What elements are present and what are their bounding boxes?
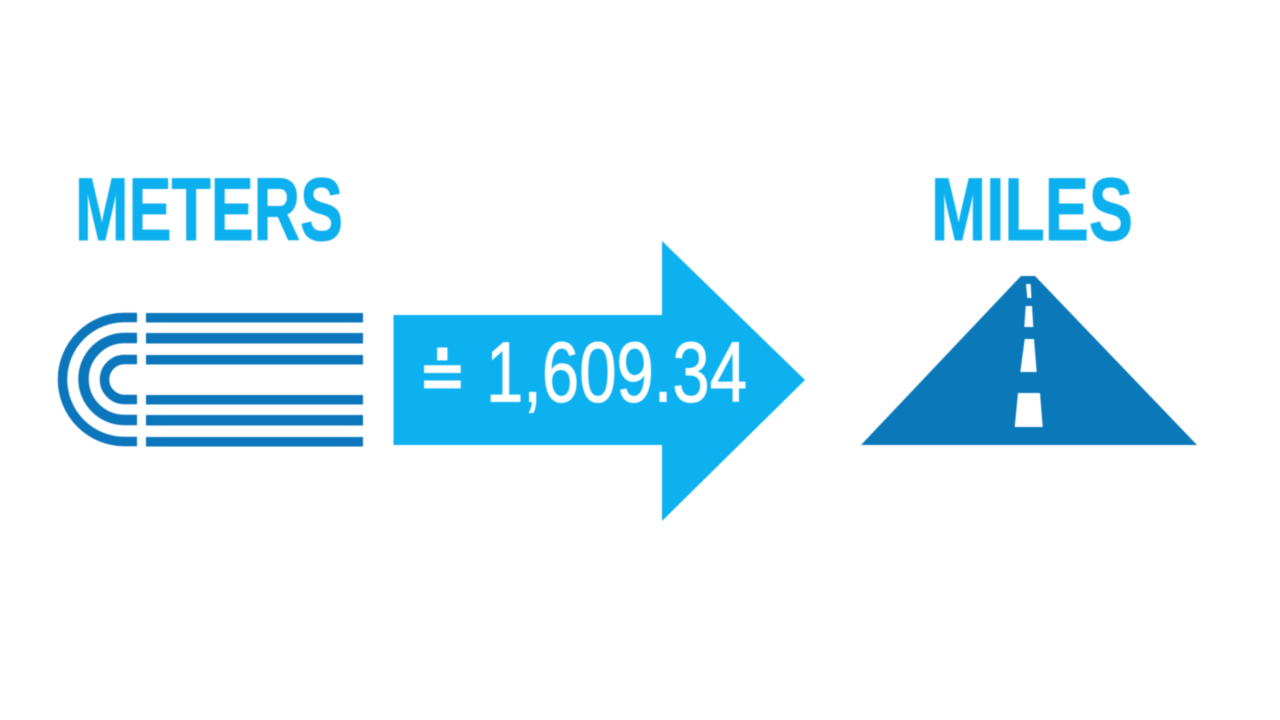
heading: miles: MILES	[931, 159, 1133, 259]
arrow: divide by 1,609.34	[394, 241, 805, 521]
icon: road	[861, 276, 1197, 445]
conversion factor: 1,609.34	[486, 326, 747, 420]
icon: running track	[62, 313, 363, 446]
divide symbol: ≐	[418, 336, 467, 415]
heading: meters: METERS	[75, 159, 343, 259]
